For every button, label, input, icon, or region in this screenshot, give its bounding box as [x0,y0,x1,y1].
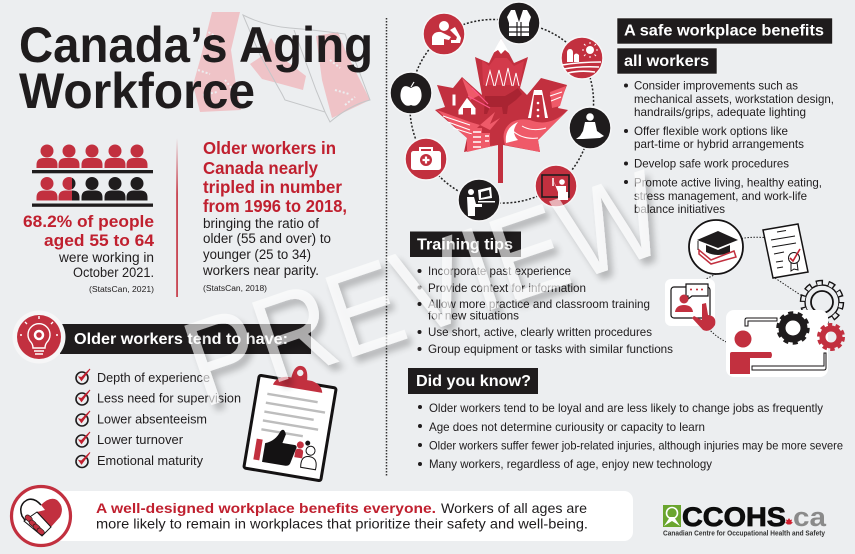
heading: did you know [408,368,538,394]
stat: older workers tripled: Older workers in [203,138,336,158]
heading: older workers tend to have [60,324,311,354]
faded flag behind title [193,12,370,122]
list: training tips: Use short, active, clearly written procedures [428,325,652,339]
list: safe workplace tips: Consider improvements such as [634,78,798,92]
list: safe workplace tips: part-time or hybrid arrangements [634,137,804,151]
icon: farm and sun [561,37,603,79]
stat: older workers tripled: (StatsCan, 2018) [203,284,267,293]
checklist: older worker traits: Emotional maturity [97,453,203,468]
title: Canada’s Aging [19,17,373,73]
stat: older workers tripled: from 1996 to 2018, [203,196,347,216]
icon: safety vest [498,2,540,44]
list: safe workplace tips: stress management, and work-life [634,189,807,203]
list: training tips: for new situations [428,308,519,322]
icon: apple [390,72,432,114]
list: training tips: Allow more practice and classroom training [428,297,650,311]
list: did you know: Many workers, regardless of age, enjoy new technology [429,457,712,471]
checklist: older worker traits: Less need for supervision [97,390,241,406]
heading: safe workplace [617,18,832,74]
stat: older workers tripled: tripled in number [203,177,342,197]
stat: people working: were working in [58,250,154,265]
list: safe workplace tips: handrails/grips, adequate lighting [634,105,806,119]
icon: meditation [569,107,611,149]
stat: older workers tripled: younger (25 to 34) [203,247,311,262]
connector ring [410,19,594,203]
logo: CCOHS [663,502,827,538]
list: safe workplace tips [624,78,834,216]
heading: safe workplace: A safe workplace benefits [624,22,824,40]
list: did you know: Older workers tend to be loyal and are less likely to change jobs as frequently [429,401,823,415]
stat: people working: (StatsCan, 2021) [89,285,154,294]
logo: CCOHS: ca [793,502,827,532]
list: safe workplace tips: Offer flexible work options like [634,124,788,138]
panel: trainer with gears [726,310,844,377]
stat: older workers tripled: bringing the ratio of [203,216,319,231]
stat: older workers tripled: older (55 and over) to [203,231,331,246]
icon: light bulb with gear [12,310,66,364]
heading: safe workplace: all workers [624,53,709,70]
icon: teacher at board [535,165,577,207]
heading: did you know: Did you know? [416,373,531,390]
panel: chat and tap card [665,279,715,331]
icon: computer user [458,179,500,221]
checklist: older worker traits: Lower turnover [97,432,184,447]
list: safe workplace tips: mechanical assets, workstation design, [634,92,834,106]
callout bar: A well-designed workplace benefits everyone. [96,500,436,516]
stat: people working: 68.2% of people [23,212,154,231]
heading: training tips [410,232,521,257]
icon: clipboard with thumbs up [244,359,339,481]
list: training tips: Provide context for information [428,281,586,295]
checklist: older worker traits: Depth of experience [97,370,210,385]
icon: handshake heart [10,485,72,547]
list: training tips [418,264,673,356]
training illustration [665,220,844,377]
vertical red rule [176,138,178,297]
list: did you know: Age does not determine curiousity or capacity to learn [429,420,705,434]
stat: people working: aged 55 to 64 [44,231,155,250]
stat: older workers tripled: workers near parity. [202,263,319,278]
list: training tips: Group equipment or tasks with similar functions [428,342,673,356]
divider [386,18,388,476]
icon: certificate [763,224,808,278]
logo: CCOHS: CCOHS [682,502,786,532]
heading: training tips: Training tips [417,236,513,254]
callout bar: more likely to remain in workplaces that prioritize their safety and well-being. [96,516,588,532]
checklist: older worker traits: Lower absenteeism [97,412,207,426]
list: did you know [418,401,843,471]
list: safe workplace tips: Promote active living, healthy eating, [634,176,822,190]
heading: older workers tend to have: Older workers tend to have: [74,331,288,348]
icon: outlined gear [802,282,842,322]
maple leaf illustration [435,38,568,183]
checklist: older worker traits [76,369,241,468]
title: Workforce [19,63,255,119]
list: safe workplace tips: Develop safe work procedures [634,156,789,170]
icon: first aid kit [405,138,447,180]
stat: people working [23,212,155,294]
callout bar: Workers of all ages are [441,500,587,516]
callout bar [50,491,633,541]
list: training tips: Incorporate past experience [428,264,571,278]
icon: person at microscope [423,13,465,55]
stat: older workers tripled: Canada nearly [203,158,318,178]
pictogram: 68.2 percent of people [32,144,153,207]
watermark: PREVIEW: PREVIEW [168,144,680,433]
list: safe workplace tips: balance initiatives [634,202,725,216]
stat: older workers tripled [202,138,347,293]
stat: people working: October 2021. [73,265,154,280]
logo: CCOHS: Canadian Centre for Occupational Health and Safety [663,528,826,538]
title [19,17,373,119]
icon: graduation cap and books [689,220,743,274]
